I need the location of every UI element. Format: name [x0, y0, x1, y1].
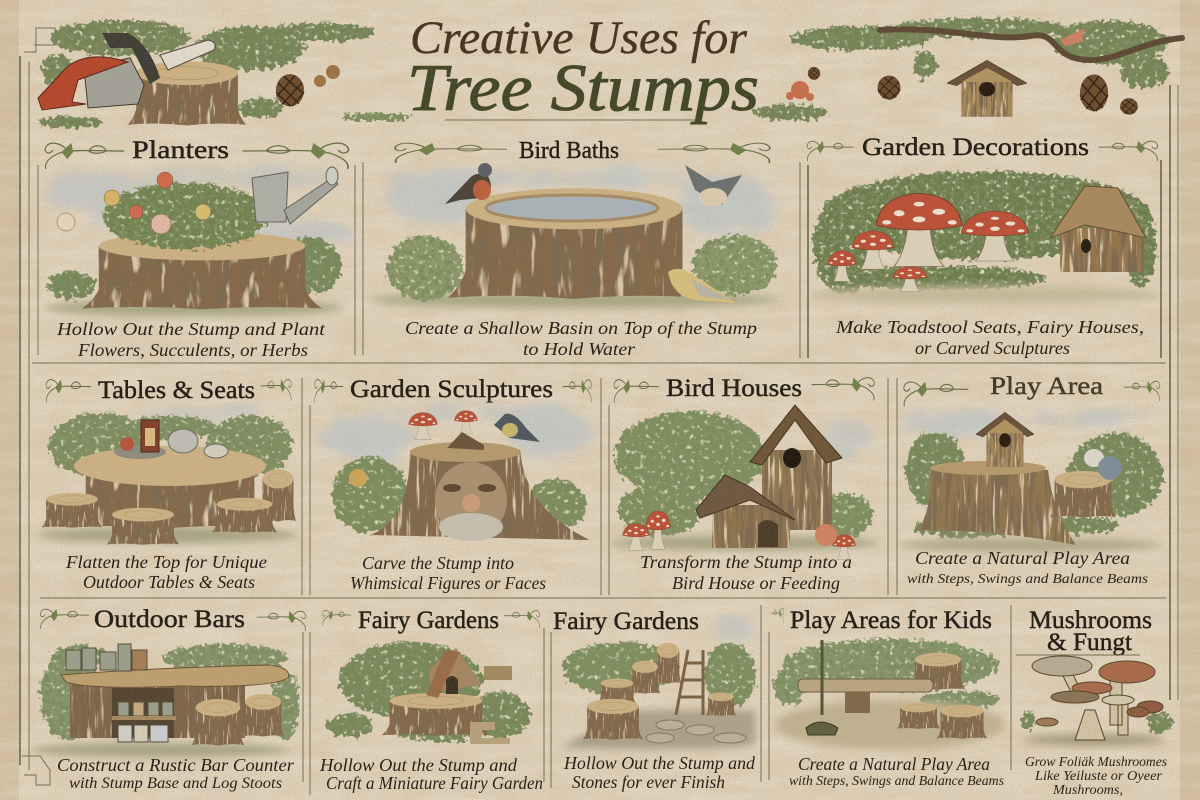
caption	[640, 552, 852, 593]
stumps	[655, 643, 681, 684]
mushrooms	[623, 511, 856, 559]
heading: Fairy Gardens: Fairy Gardens	[358, 607, 499, 634]
heading: Bird Baths: Bird Baths	[519, 138, 619, 164]
fairy house	[1050, 186, 1146, 272]
counter base	[70, 682, 245, 738]
caption: Bird House or Feeding	[672, 573, 840, 593]
tea set	[114, 420, 228, 459]
stumps front	[897, 703, 940, 729]
panel: Mushrooms & Fungi	[1016, 607, 1173, 798]
caption: Flatten the Top for Unique	[65, 552, 267, 572]
frame	[363, 162, 800, 358]
heading: Mushrooms & Fungt: & Fungt	[1047, 629, 1132, 656]
fairy house	[426, 648, 512, 698]
frame	[896, 378, 898, 595]
caption: Hollow Out the Stump and	[319, 755, 518, 775]
caption: with Steps, Swings and Balance Beams	[789, 774, 1005, 789]
heading: Play Area: Play Area	[990, 373, 1103, 400]
panel: Bird Baths	[363, 138, 800, 359]
caption: Create a Shallow Basin on Top of the Stump	[405, 318, 757, 338]
caption: Create a Natural Play Area	[915, 548, 1130, 568]
caption: Create a Natural Play Area	[798, 754, 990, 774]
heading: Bird Baths	[395, 138, 770, 164]
caption	[319, 755, 543, 793]
bottles	[66, 644, 173, 742]
flower	[786, 81, 814, 101]
caption	[1025, 755, 1168, 798]
caption: Stones for ever Finish	[572, 772, 725, 792]
caption: Make Toadstool Seats, Fairy Houses,	[835, 317, 1144, 337]
heading: Garden Sculptures: Garden Sculptures	[350, 376, 553, 403]
panel: Fairy Gardens (stones)	[551, 605, 761, 792]
title: Creative Uses for	[410, 12, 748, 64]
caption: Carve the Stump into	[362, 553, 514, 573]
mushroom group	[828, 194, 1029, 291]
illustration: cluster of fungi	[1021, 656, 1173, 746]
header art left: chainsaw on stump with foliage	[38, 20, 410, 128]
heading: Bird Houses	[614, 375, 874, 402]
heading: Fairy Gardens: Fairy Gardens	[553, 608, 699, 635]
frame	[310, 628, 544, 795]
heading: Outdoor Bars	[40, 606, 306, 633]
frame	[609, 378, 888, 595]
heading: Bird Houses: Bird Houses	[666, 375, 802, 402]
ladder	[676, 650, 703, 715]
caption: with Stump Base and Log Stoots	[69, 775, 282, 792]
heading: Garden Decorations	[807, 134, 1158, 161]
pine cone	[276, 74, 304, 106]
caption: Transform the Stump into a	[640, 552, 852, 572]
small bird house	[976, 412, 1034, 467]
caption	[907, 548, 1149, 587]
panel: Tables & Seats	[38, 377, 302, 595]
caption: to Hold Water	[523, 339, 636, 359]
caption	[563, 753, 756, 792]
heading: Mushrooms & Fungt	[1016, 607, 1152, 656]
caption: Whimsical Figures or Faces	[350, 573, 546, 593]
frame	[38, 165, 355, 355]
log stump	[128, 61, 246, 125]
caption	[56, 319, 326, 360]
caption	[350, 553, 546, 593]
illustration: rustic bar counter	[30, 644, 299, 757]
header art right: branch, birdhouse, cones	[752, 18, 1182, 120]
branch	[880, 29, 1182, 60]
stools	[260, 469, 296, 521]
pine cones	[878, 76, 900, 99]
stools	[242, 694, 284, 737]
bird	[1084, 449, 1104, 467]
carved face	[435, 462, 507, 541]
caption: or Carved Sculptures	[915, 338, 1070, 358]
heading: Tables & Seats: Tables & Seats	[98, 377, 255, 404]
small leaf cluster	[340, 113, 410, 121]
panel: Garden Sculptures	[310, 376, 601, 595]
illustration: balance beam, swing and stumps	[774, 639, 1005, 750]
heading: Mushrooms & Fungt: Mushrooms	[1029, 607, 1152, 634]
acorns	[314, 65, 340, 87]
illustration: stump bird bath with birds	[370, 163, 780, 308]
heading: Play Area	[904, 373, 1160, 406]
caption: Outdoor Tables & Seats	[83, 572, 255, 592]
flying bird	[685, 165, 742, 206]
watering can	[252, 167, 338, 224]
stump behind	[911, 653, 965, 690]
frame	[551, 605, 761, 788]
heading: Tables & Seats	[46, 377, 291, 404]
heading: Garden Sculptures	[315, 376, 591, 403]
illustration: stump table and seats	[38, 406, 298, 545]
heading: Fairy Gardens	[323, 607, 540, 634]
heading: Outdoor Bars: Outdoor Bars	[94, 606, 245, 633]
heading: Planters: Planters	[132, 137, 229, 164]
frame	[808, 160, 1161, 358]
flowers	[57, 172, 211, 234]
mushrooms and bird	[409, 410, 540, 450]
illustration: bird house and cottage	[610, 405, 880, 559]
illustration: mushrooms and fairy house	[810, 171, 1160, 304]
counter slab	[61, 665, 289, 687]
chainsaw	[38, 33, 215, 110]
illustration: planter stump with flowers and watering can	[45, 167, 350, 316]
caption: with Steps, Swings and Balance Beams	[907, 572, 1149, 587]
illustration: stump with small bird house and log	[900, 412, 1163, 552]
caption	[405, 318, 757, 359]
caption: Grow Foliäk Mushroomes	[1025, 755, 1168, 770]
robin	[445, 163, 492, 204]
heading: Play Areas for Kids: Play Areas for Kids	[790, 607, 992, 634]
panel: Bird Houses	[609, 375, 888, 595]
frame	[301, 378, 303, 595]
panel: Play Area	[897, 373, 1163, 595]
panel: Play Areas for Kids	[769, 605, 1011, 789]
swing post	[820, 640, 824, 715]
log	[1050, 471, 1116, 518]
illustration: carved face stump	[320, 407, 595, 541]
frame	[769, 605, 1011, 780]
beam	[798, 679, 933, 692]
caption	[65, 552, 267, 592]
foliage garland right	[752, 18, 1169, 120]
caption	[789, 754, 1005, 789]
stump table	[72, 449, 268, 528]
stone path	[646, 720, 746, 743]
illustration: miniature fairy house on stump	[327, 642, 530, 744]
birdhouse	[947, 60, 1027, 117]
caption: Like Yeiluste or Oyeer	[1034, 769, 1163, 784]
foliage garland left	[38, 20, 375, 128]
panel: Garden Decorations	[807, 134, 1161, 358]
caption: Construct a Rustic Bar Counter	[57, 755, 295, 775]
frame	[310, 378, 601, 595]
title	[407, 12, 759, 125]
yellow bird	[668, 269, 736, 303]
panel: Fairy Gardens (house)	[310, 607, 544, 795]
caption	[57, 755, 295, 792]
panel: Planters	[38, 137, 355, 360]
main stump	[918, 470, 1076, 545]
illustration: stepping stumps, ladder and stone path	[560, 618, 756, 749]
cottage	[696, 475, 795, 548]
heading: Garden Decorations: Garden Decorations	[862, 134, 1089, 161]
tall bird house	[750, 405, 842, 530]
title: Tree Stumps	[407, 51, 759, 125]
panel: Outdoor Bars	[30, 606, 306, 792]
frame	[302, 632, 304, 782]
caption	[835, 317, 1144, 358]
caption: Hollow Out the Stump and Plant	[56, 319, 326, 339]
caption: Flowers, Succulents, or Herbs	[77, 340, 308, 360]
heading: Planters	[45, 137, 348, 169]
caption: Craft a Miniature Fairy Garden	[326, 773, 543, 793]
caption: Hollow Out the Stump and	[563, 753, 756, 773]
caption: Mushrooms,	[1052, 783, 1123, 798]
steps	[470, 722, 510, 744]
